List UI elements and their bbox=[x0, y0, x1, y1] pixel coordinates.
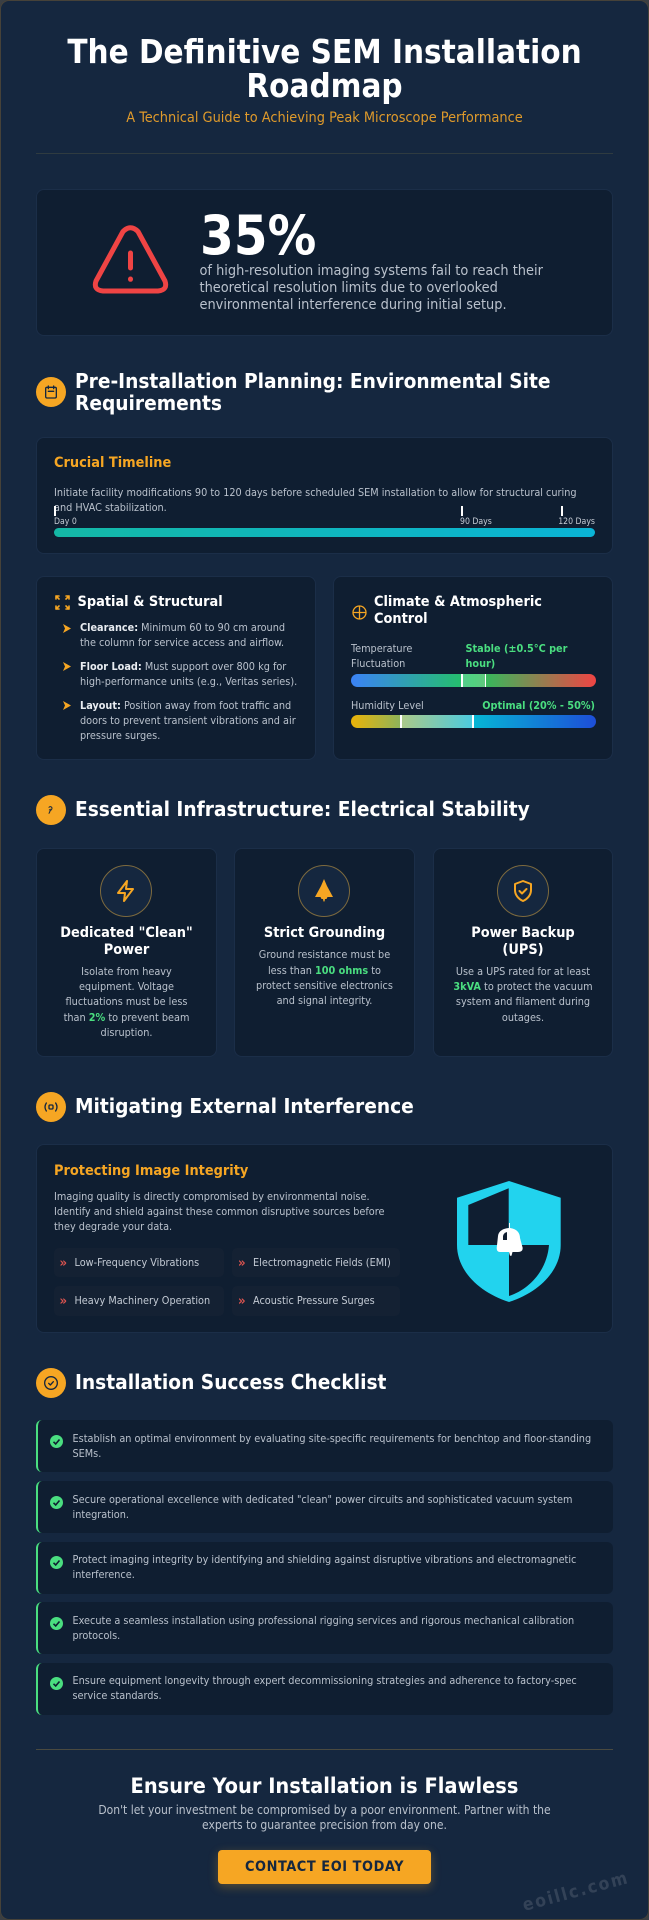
chip: heavy machinery: Heavy Machinery Operation bbox=[74, 1294, 210, 1307]
heading: Strict Grounding bbox=[264, 925, 385, 941]
call to action text: Don't let your investment be compromised by a poor environment. Partner with the bbox=[98, 1802, 551, 1816]
heading bbox=[374, 594, 542, 627]
list item: floor load bbox=[63, 660, 297, 688]
body text: than 2% to prevent beam bbox=[64, 1011, 189, 1024]
timeline markers: Day 0 bbox=[54, 517, 77, 527]
icon: shield with lock bbox=[457, 1181, 561, 1302]
body text: and signal integrity. bbox=[277, 994, 372, 1007]
icon: check circle bbox=[36, 1368, 66, 1398]
checklist item 2 bbox=[36, 1481, 613, 1533]
chip: acoustic pressure: » bbox=[238, 1294, 246, 1309]
heading: Control bbox=[374, 611, 428, 627]
checklist item 2: integration. bbox=[72, 1508, 129, 1521]
call to action text: experts to guarantee precision from day one. bbox=[202, 1818, 447, 1832]
section heading: pre-installation planning: Pre-Installation Planning: Environmental Site bbox=[75, 369, 550, 393]
panel: strict grounding bbox=[234, 848, 414, 1057]
icon: calendar bbox=[36, 377, 66, 407]
icon: shield check bbox=[496, 865, 548, 917]
body text: Ground resistance must be bbox=[259, 948, 390, 961]
body text: Use a UPS rated for at least bbox=[456, 965, 590, 978]
body text: less than 100 ohms to bbox=[268, 964, 381, 976]
body text: equipment. Voltage bbox=[79, 980, 174, 993]
checklist item 3: Protect imaging integrity by identifying and shielding against disruptive vibrations and electromagnetic bbox=[72, 1553, 576, 1566]
humidity gauge bbox=[351, 715, 596, 728]
checklist item 4 bbox=[36, 1602, 613, 1654]
humidity value: Optimal (20% - 50%) bbox=[482, 698, 595, 712]
temperature value: hour) bbox=[466, 657, 495, 670]
chip: heavy machinery: » bbox=[60, 1294, 67, 1309]
icon: expand arrows bbox=[55, 595, 70, 610]
body text: disruption. bbox=[101, 1026, 152, 1039]
list item: layout: doors to prevent transient vibrations and air bbox=[80, 714, 296, 727]
checklist item 3 bbox=[36, 1542, 613, 1594]
panel: power backup bbox=[432, 848, 613, 1057]
list item: clearance: Clearance: Minimum 60 to 90 cm around bbox=[80, 621, 285, 634]
timeline markers: 120 Days bbox=[558, 517, 595, 527]
panel: crucial timeline bbox=[36, 436, 613, 554]
body text: they degrade your data. bbox=[54, 1220, 172, 1233]
body text bbox=[453, 965, 593, 1024]
timeline heading: Crucial Timeline bbox=[54, 454, 171, 470]
list item: floor load: high-performance units (e.g., Veritas series). bbox=[80, 675, 297, 688]
temperature label: Temperature bbox=[351, 642, 412, 655]
panel: key statistic bbox=[36, 188, 613, 336]
checklist item 5: service standards. bbox=[72, 1689, 162, 1702]
panel: dedicated clean power bbox=[36, 848, 216, 1057]
body text: system and filament during bbox=[456, 995, 590, 1008]
title: The Definitive SEM Installation bbox=[67, 32, 582, 71]
icon: warning triangle bbox=[92, 225, 168, 294]
list item: layout: Layout: Position away from foot traffic and bbox=[80, 699, 291, 712]
body text: fluctuations must be less bbox=[66, 995, 187, 1008]
icon: crosshair bbox=[352, 605, 367, 620]
body text: Isolate from heavy bbox=[81, 965, 172, 978]
heading bbox=[471, 925, 575, 958]
button: contact: CONTACT EOI TODAY bbox=[245, 1858, 404, 1874]
heading: Power bbox=[104, 942, 149, 958]
body text bbox=[54, 1190, 384, 1233]
icon: lightning bolt bbox=[100, 865, 152, 917]
chip: electromagnetic fields bbox=[232, 1248, 400, 1277]
heading: Climate & Atmospheric bbox=[374, 594, 542, 610]
body text bbox=[64, 965, 189, 1039]
icon: grounding spike bbox=[298, 865, 350, 917]
checklist item 1: Establish an optimal environment by evaluating site-specific requirements for benchtop and floor-standing bbox=[72, 1432, 591, 1444]
section heading: external interference: Mitigating External Interference bbox=[75, 1094, 414, 1118]
timeline bar bbox=[54, 528, 595, 537]
humidity label: Humidity Level bbox=[351, 698, 424, 712]
heading: (UPS) bbox=[502, 942, 544, 958]
chip: electromagnetic fields: Electromagnetic Fields (EMI) bbox=[253, 1256, 391, 1268]
checklist item 4: Execute a seamless installation using professional rigging services and rigorous mechanical calibration bbox=[72, 1614, 574, 1626]
chip: electromagnetic fields: » bbox=[238, 1256, 246, 1270]
temperature value: Stable (±0.5°C per bbox=[466, 642, 567, 655]
chip: low-frequency vibrations: » bbox=[60, 1256, 67, 1270]
section heading: success checklist: Installation Success Checklist bbox=[75, 1370, 386, 1394]
timeline markers: 90 Days bbox=[460, 517, 492, 527]
watermark: eoillc.com bbox=[520, 1868, 631, 1916]
chip: acoustic pressure bbox=[232, 1286, 400, 1316]
body text bbox=[256, 948, 393, 1007]
checklist item 1 bbox=[36, 1420, 613, 1472]
subtitle: A Technical Guide to Achieving Peak Microscope Performance bbox=[126, 110, 523, 126]
section heading: electrical stability: Essential Infrastructure: Electrical Stability bbox=[75, 797, 530, 821]
chip: low-frequency vibrations: Low-Frequency Vibrations bbox=[74, 1256, 199, 1268]
icon: radio waves bbox=[36, 1092, 66, 1122]
checklist item 5 bbox=[36, 1662, 613, 1714]
heading: Power Backup bbox=[471, 925, 575, 941]
temperature label bbox=[350, 642, 412, 670]
heading: Protecting Image Integrity bbox=[54, 1162, 248, 1178]
checklist item 1: SEMs. bbox=[72, 1447, 101, 1460]
list item: clearance bbox=[63, 621, 285, 649]
chip: acoustic pressure: Acoustic Pressure Surges bbox=[253, 1294, 375, 1307]
panel: climate and atmospheric control bbox=[333, 576, 613, 760]
temperature gauge bbox=[351, 674, 596, 686]
title: Roadmap bbox=[246, 66, 403, 104]
call to action heading: Ensure Your Installation is Flawless bbox=[131, 1774, 518, 1799]
list item: layout: pressure surges. bbox=[80, 729, 160, 742]
body text: outages. bbox=[502, 1011, 544, 1024]
temperature label: Fluctuation bbox=[351, 657, 405, 670]
button: contact bbox=[218, 1850, 431, 1884]
timeline text: Initiate facility modifications 90 to 120 days before scheduled SEM installation to allow for structural curing bbox=[54, 486, 577, 499]
panel: protecting image integrity bbox=[36, 1144, 613, 1333]
section heading: pre-installation planning bbox=[36, 369, 550, 415]
stat description: theoretical resolution limits due to overlooked bbox=[200, 280, 498, 296]
list item: floor load: Floor Load: Must support over 800 kg for bbox=[80, 660, 286, 673]
temperature value bbox=[466, 642, 568, 670]
stat description: environmental interference during initial setup. bbox=[200, 297, 507, 313]
chip: heavy machinery bbox=[54, 1286, 224, 1316]
body text: protect sensitive electronics bbox=[256, 979, 393, 992]
stat description: of high-resolution imaging systems fail to reach their bbox=[200, 262, 543, 278]
checklist item 5: Ensure equipment longevity through expert decommissioning strategies and adherence to factory-spec bbox=[72, 1674, 577, 1687]
icon: ear glyph bbox=[36, 795, 66, 825]
checklist item 4: protocols. bbox=[72, 1629, 120, 1642]
checklist item 3: interference. bbox=[72, 1568, 135, 1581]
timeline text bbox=[54, 486, 577, 514]
timeline markers bbox=[54, 506, 595, 527]
heading: Spatial & Structural bbox=[78, 594, 223, 610]
panel: spatial and structural bbox=[36, 576, 316, 760]
stat number: 35% bbox=[200, 204, 316, 267]
title bbox=[67, 32, 582, 104]
timeline text: and HVAC stabilization. bbox=[54, 501, 167, 514]
body text: 3kVA to protect the vacuum bbox=[453, 980, 593, 993]
checklist item 2: Secure operational excellence with dedicated "clean" power circuits and sophisticated vacuum system bbox=[72, 1492, 572, 1506]
heading bbox=[60, 925, 193, 958]
list item: clearance: the column for service access and airflow. bbox=[80, 636, 284, 649]
section heading: pre-installation planning: Requirements bbox=[75, 391, 222, 415]
list item: layout bbox=[63, 699, 296, 742]
body text: Imaging quality is directly compromised by environmental noise. bbox=[54, 1190, 370, 1202]
heading: Dedicated "Clean" bbox=[60, 925, 193, 941]
call to action text bbox=[98, 1802, 551, 1832]
body text: Identify and shield against these common disruptive sources before bbox=[54, 1205, 384, 1218]
chip: low-frequency vibrations bbox=[54, 1248, 224, 1277]
stat description bbox=[200, 262, 543, 313]
